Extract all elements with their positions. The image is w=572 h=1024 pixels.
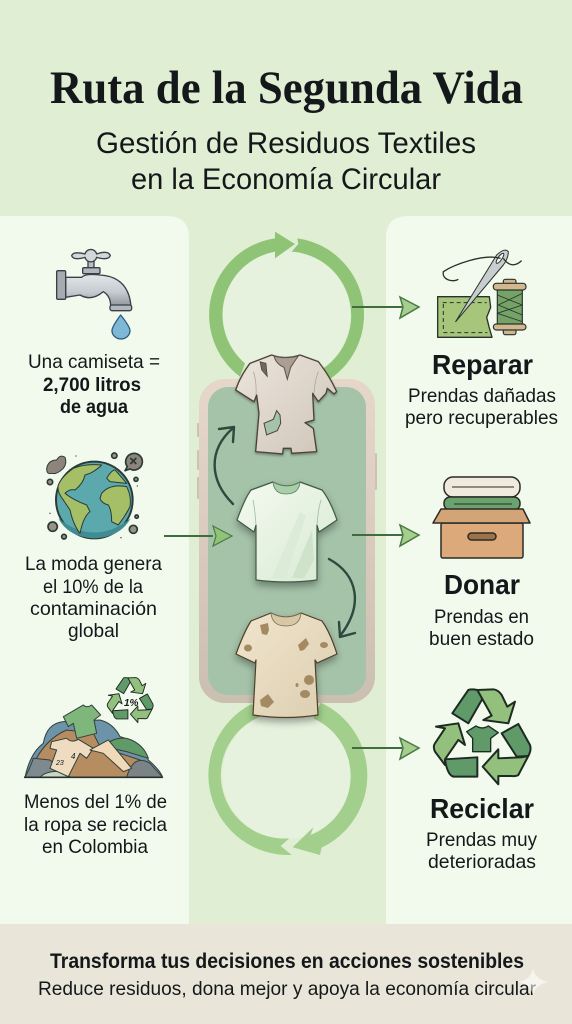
icon: water tap [57,249,132,339]
arrow: facts into cycle [164,526,232,546]
text: Donar: buen estado [429,628,534,650]
text: Donar: Donar [444,569,520,600]
text: water fact: de agua [60,396,128,418]
panel: left facts [0,216,189,924]
text: recycling fact [24,791,167,858]
icon: donation box [433,477,530,558]
arrow: to Reciclar [352,738,419,759]
footer text: Reduce residuos, dona mejor y apoya la economía circular [38,978,536,1000]
icon: clothes pile with recycling: 23 [55,760,64,767]
arrow: to Reparar [352,297,419,318]
text: pollution fact: contaminación [30,598,157,620]
text: recycling fact: Menos del 1% de [24,791,167,813]
shirt: stained [236,613,337,718]
curved arrow: new shirt to repaired shirt [215,427,234,504]
bottom cycle arrow [208,703,367,855]
text: Reparar: pero recuperables [405,407,558,429]
text: water fact: Una camiseta = [28,351,160,373]
subtitle: Gestión de Residuos Textiles [96,127,476,160]
text: recycling fact: en Colombia [42,836,148,858]
tablet frame [197,379,377,703]
text: pollution fact [25,553,162,642]
title: Ruta de la Segunda Vida [50,62,523,114]
shirt: damaged [236,355,337,454]
text: pollution fact: global [68,620,119,642]
text: recycling fact: la ropa se recicla [24,814,167,836]
text: Reciclar: Reciclar [430,793,534,824]
icon: needle and spool [438,250,526,337]
text: Reciclar: Prendas muy [426,829,537,851]
top cycle arrow [209,232,364,379]
text: water fact: 2,700 litros [43,374,141,396]
text: Donar [429,569,534,650]
subtitle [96,127,476,196]
subtitle: en la Economía Circular [131,163,441,196]
text: Reparar: Reparar [432,349,533,380]
panel: right actions [386,216,572,924]
icon: recycling with shirt [434,689,531,784]
icon: clothes pile with recycling: 1% [124,698,139,709]
icon: clothes pile with recycling [24,678,163,777]
icon: polluted globe [47,453,142,539]
text: Reciclar: deterioradas [428,851,536,873]
curved arrow: new shirt to stained shirt [329,559,355,637]
shirt: clean [237,482,337,582]
text: Reparar [405,349,558,429]
footer band [0,924,572,1024]
icon: clothes pile with recycling: 4 [71,752,76,761]
text: Reciclar [426,793,537,873]
text: pollution fact: el 10% de la [43,576,143,598]
text: pollution fact: La moda genera [25,553,162,575]
footer headline: Transforma tus decisiones en acciones sostenibles [50,950,524,973]
text: water fact [28,351,160,418]
text: Donar: Prendas en [434,606,529,628]
text: Reparar: Prendas dañadas [408,385,556,407]
arrow: to Donar [352,525,419,546]
sparkle mark [518,968,549,996]
